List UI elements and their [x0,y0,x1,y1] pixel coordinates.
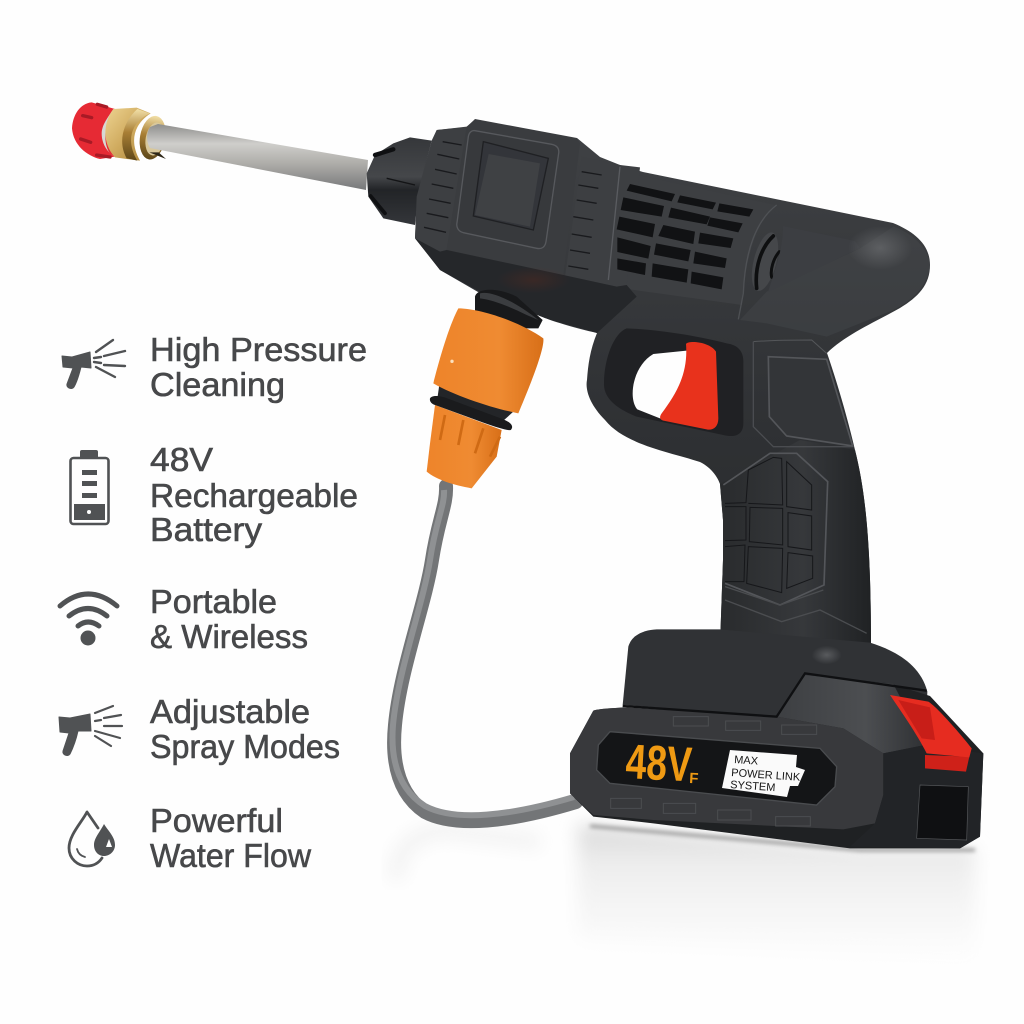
white power link label: SYSTEM [730,779,776,794]
white power link label: MAX [734,754,759,768]
feature: 48V rechargeable battery: Rechargeable [150,477,358,514]
battery window [917,785,968,840]
cooling vents [617,184,753,289]
feature: 48V rechargeable battery [70,441,358,548]
battery top slope [777,675,925,753]
white power link label: POWER LINK [731,767,801,784]
water hose [392,486,576,821]
grip pattern [723,340,867,633]
water coupler [427,290,543,488]
feature: high pressure cleaning: Cleaning [150,366,285,403]
square top panel [447,119,580,275]
pressure washer product [72,102,983,848]
black neck [437,380,513,427]
label panel [597,732,837,805]
feature: 48V rechargeable battery: 48V [150,441,213,478]
feature: adjustable spray modes: Spray Modes [150,728,340,765]
orange sleeve [433,308,543,413]
black ring [430,396,512,430]
orange nut [427,405,502,488]
feature: adjustable spray modes [59,693,340,765]
icon: water drops [69,812,115,866]
front ribbed collar [415,127,467,252]
icon: wireless signal [60,594,117,646]
battery front face [570,707,883,829]
trigger guard recess [604,328,743,436]
trigger [660,342,718,430]
black mount [475,290,543,328]
lower body shade [415,238,637,333]
grip [720,440,871,645]
floor reflection [396,824,975,960]
rear triangle panel [768,226,860,292]
feature: high pressure cleaning [62,331,367,403]
voltage badge: F [689,770,699,787]
battery lower housing [570,675,983,848]
gun body [367,119,930,645]
feature: powerful water flow: Powerful [150,802,283,839]
white power link label [722,750,805,797]
nozzle assembly [72,102,169,162]
battery pack [570,629,983,848]
feature: high pressure cleaning: High Pressure [150,331,367,368]
red nozzle cap [72,102,115,159]
metal wand [147,124,368,190]
latch red [890,695,972,772]
icon: spray gun [62,340,125,388]
feature: powerful water flow [69,802,311,874]
icon: spray gun with fan [59,706,122,755]
rear cap and knob [738,205,930,337]
feature: adjustable spray modes: Adjustable [150,693,310,730]
feature: 48V rechargeable battery: Battery [150,511,263,548]
feature list [59,331,367,874]
motor housing behind vents [620,172,775,305]
end cap highlight [850,745,983,848]
feature: portable and wireless: Portable [150,583,277,620]
rear highlight [848,226,912,270]
brass connector [102,108,169,162]
voltage badge: 48V [624,735,693,792]
front head of gun [367,119,640,333]
rear ribbed collar [565,157,640,287]
feature: portable and wireless: & Wireless [150,618,308,655]
nozzle chuck [367,137,432,225]
feature: portable and wireless [60,583,308,655]
feature: powerful water flow: Water Flow [150,837,311,874]
icon: battery [70,450,108,524]
housing slots [611,717,817,826]
battery upper housing [623,629,927,717]
